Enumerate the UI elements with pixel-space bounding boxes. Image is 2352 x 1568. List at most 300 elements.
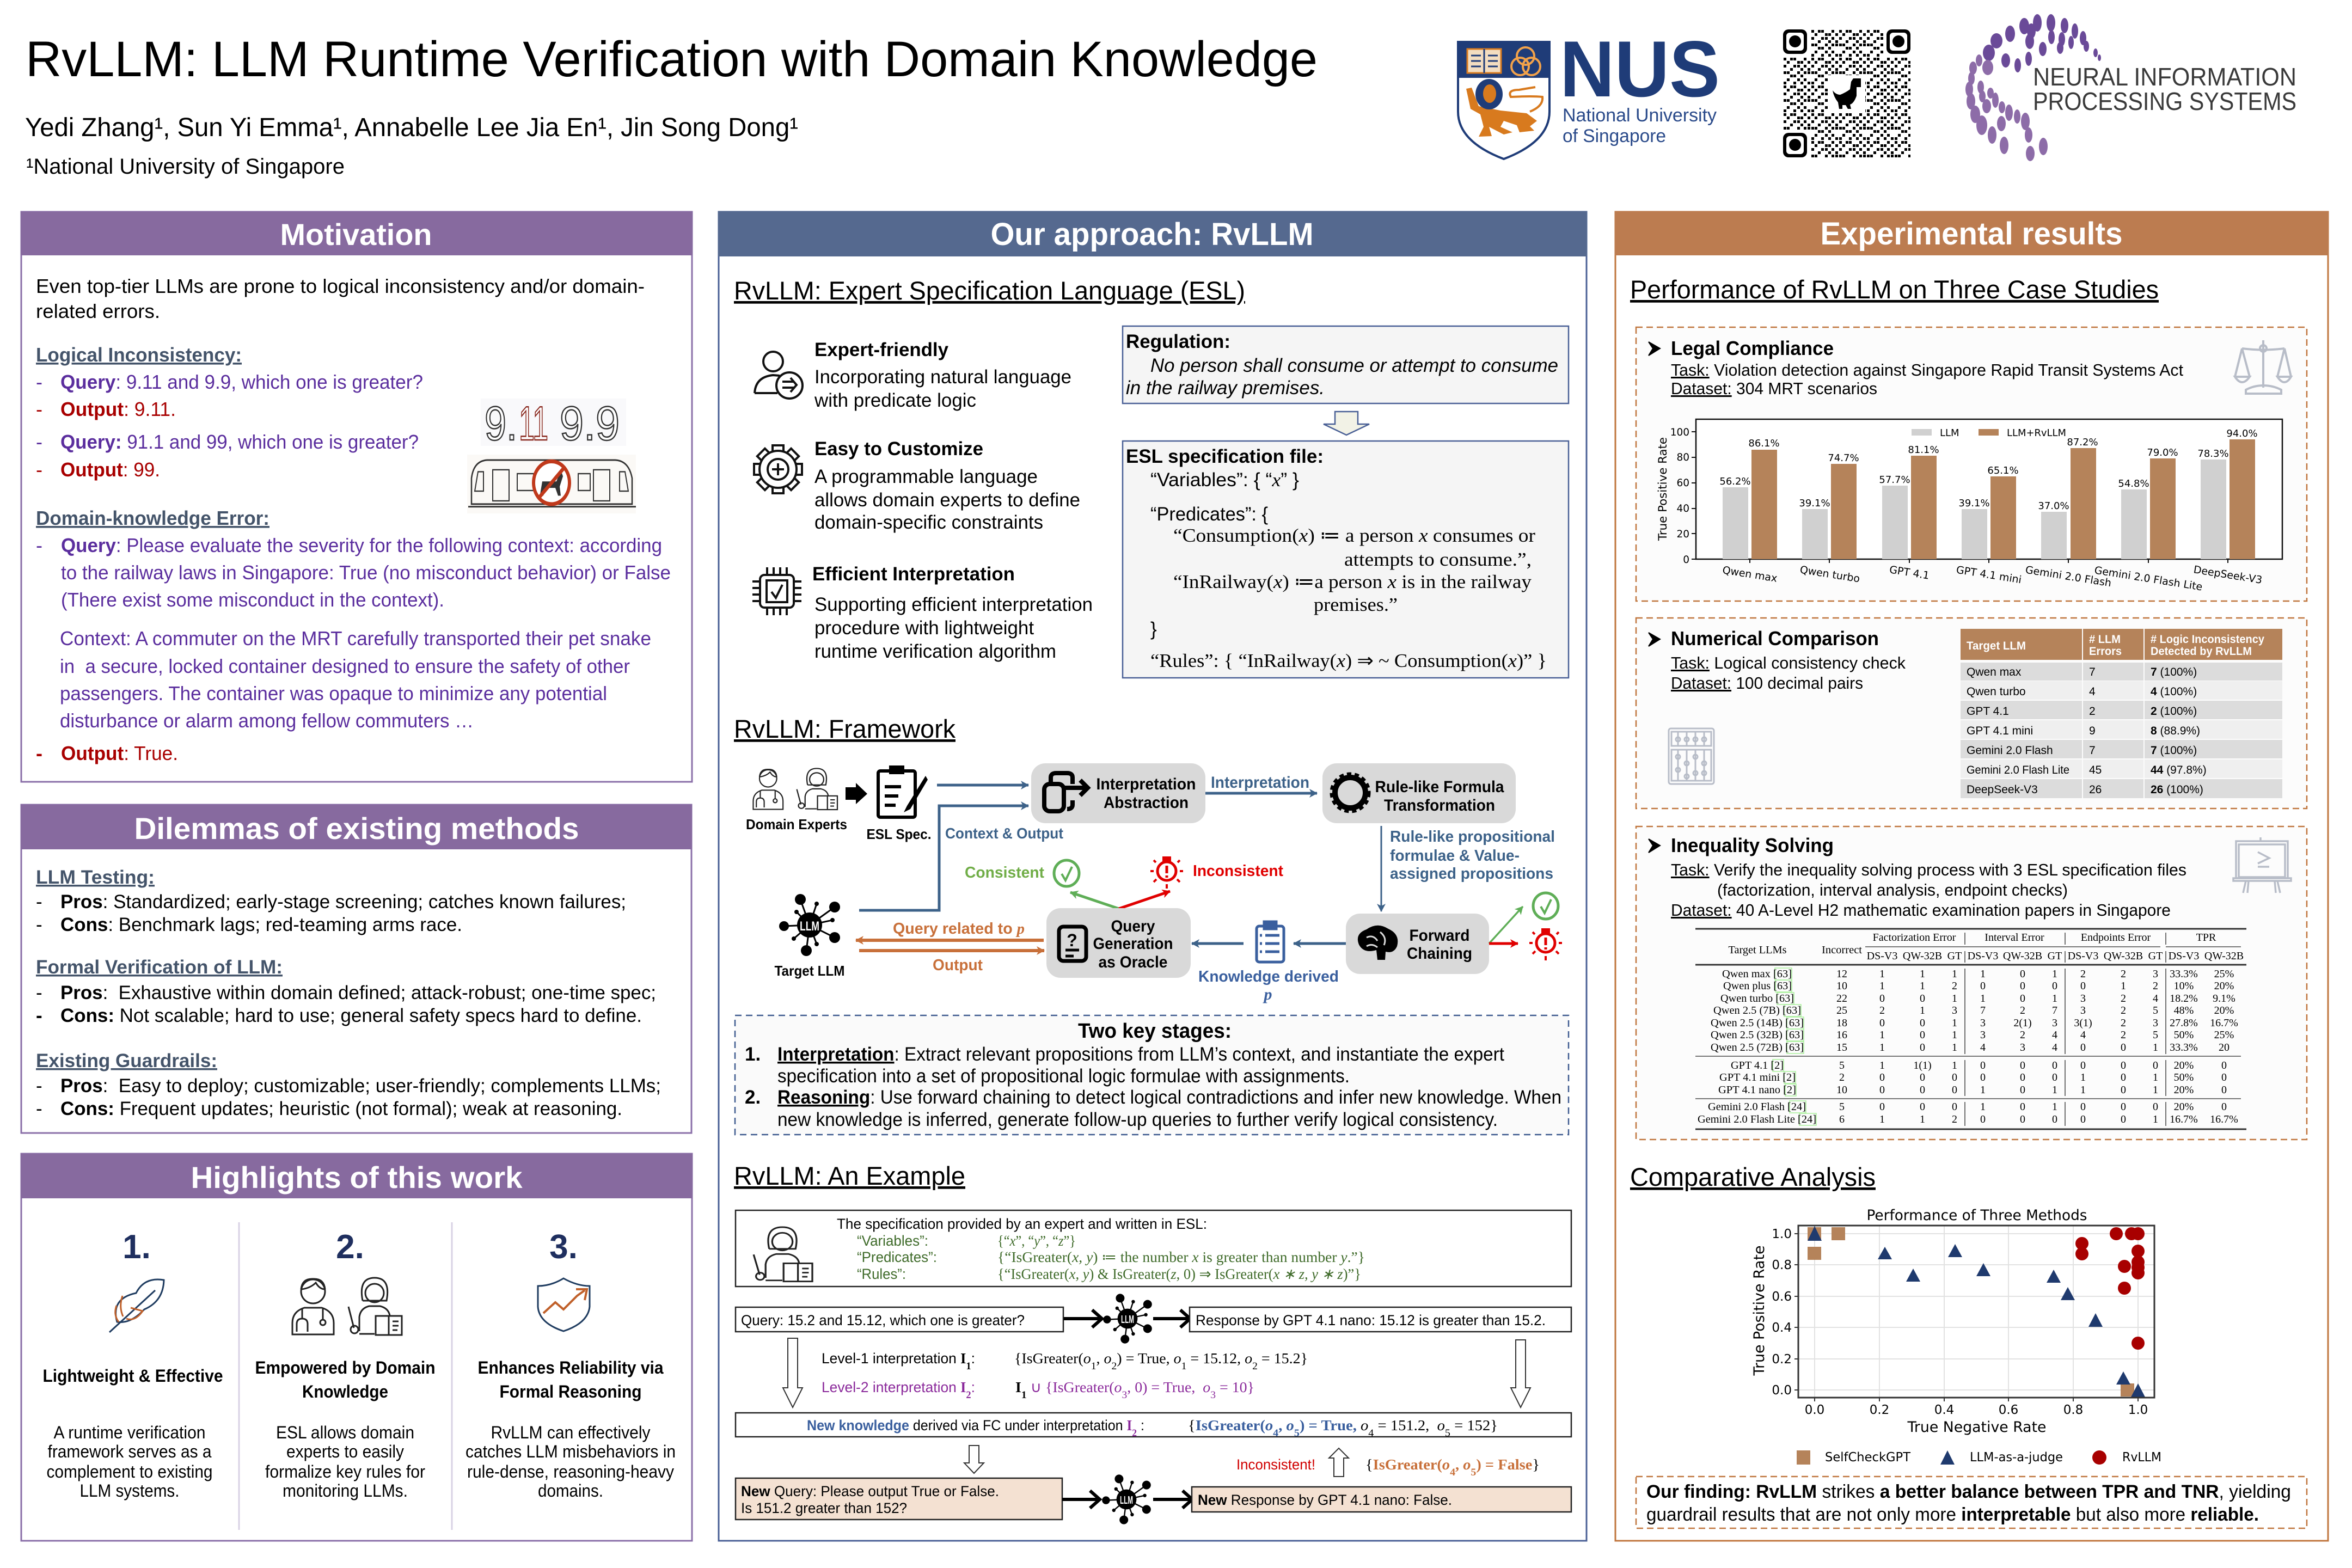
arrow: down to new query	[964, 1445, 984, 1473]
table: numerical comparison: GPT 4.1 mini	[1967, 725, 2033, 737]
arrow: formula to forward chaining	[1381, 826, 1382, 911]
table: inequality solving: 1	[2080, 1071, 2086, 1083]
table: inequality solving: 0	[2121, 1084, 2126, 1096]
logical inconsistency: Query: 9.11 and 9.9, which one is greater?	[60, 371, 423, 393]
ticks: 0.8	[1772, 1258, 1792, 1272]
highlights header	[21, 1154, 693, 1198]
judge points	[1808, 1226, 2145, 1397]
icon: ESL spec clipboard	[878, 765, 928, 817]
result consistent	[1489, 893, 1558, 944]
icon: target LLM: LLM	[800, 919, 819, 934]
formal verification	[36, 957, 656, 1026]
icon: person with arrow	[755, 352, 803, 399]
false formula: {IsGreater(o4, o5) = False}	[1365, 1456, 1540, 1478]
table: inequality solving: 3(1)	[2074, 1017, 2092, 1029]
table: inequality solving: QW-32B	[2104, 950, 2143, 962]
table: inequality solving: 0	[1879, 1101, 1885, 1113]
new response box	[1192, 1487, 1571, 1512]
ticks: 0.2	[1870, 1403, 1889, 1417]
logical inconsistency: Output: 99.	[60, 458, 160, 481]
y axis label: True Positive Rate	[1656, 437, 1669, 541]
logo: NUS	[1458, 24, 1720, 159]
ESL specification box: attempts to consume.”,	[1344, 549, 1532, 570]
table: inequality solving: 1	[2052, 993, 2057, 1004]
highlight 1	[42, 1228, 223, 1500]
table: inequality solving: 1	[1980, 968, 1986, 980]
icon: LLM second: LLM	[1120, 1494, 1133, 1506]
feature: easy to customize: domain-specific constraints	[814, 512, 1043, 533]
example: specification box: The specification provided by an expert and written in ESL:	[837, 1216, 1207, 1232]
table: inequality solving: Target LLMs	[1728, 944, 1787, 956]
table: inequality solving: 1	[1879, 1029, 1885, 1041]
table: inequality solving: 20	[2219, 1042, 2230, 1054]
formal verification: Formal Verification of LLM:	[36, 957, 283, 978]
table: numerical comparison: 4 (100%)	[2151, 685, 2197, 698]
illustration: train with no-pet sign	[467, 455, 636, 513]
highlight 3: rule-dense, reasoning-heavy	[467, 1462, 674, 1481]
dilemmas header: Dilemmas of existing methods	[134, 811, 579, 846]
panel: highlights	[21, 1154, 693, 1541]
table: inequality solving: Factorization Error	[1873, 932, 1956, 944]
LLM testing: LLM Testing:	[36, 867, 155, 888]
heading: ESL: RvLLM: Expert Specification Language (ESL)	[734, 276, 1245, 305]
table: inequality solving: 0	[1920, 1101, 1925, 1113]
logical inconsistency: Logical Inconsistency:	[36, 344, 242, 366]
table: inequality solving: 0	[2121, 1101, 2126, 1113]
legend: LLM+RvLLM	[2007, 427, 2066, 439]
highlight 2: 2.	[336, 1228, 364, 1266]
table: inequality solving: 3	[2052, 1017, 2057, 1029]
feature: expert-friendly	[755, 339, 1071, 411]
table: inequality solving: 2	[2121, 993, 2126, 1004]
feature: expert-friendly: Incorporating natural language	[814, 366, 1071, 388]
y axis: 20	[1676, 529, 1689, 540]
table: inequality solving: TPR	[2196, 932, 2216, 944]
table: inequality solving: 7	[2052, 1004, 2057, 1016]
highlight 1: Lightweight & Effective	[42, 1366, 223, 1386]
case: numerical comparison: Numerical Comparison	[1671, 627, 1879, 650]
table: inequality solving: 1	[1879, 1059, 1885, 1071]
table: inequality solving: QW-32B	[1903, 950, 1942, 962]
new knowledge box: {IsGreater( o4, o5) = True, o4 = 151.2, o5 = 152}	[1188, 1417, 1498, 1438]
arrow: spec to abstraction	[937, 784, 1028, 786]
label: ESL spec: ESL Spec.	[867, 826, 931, 842]
label: domain experts: Domain Experts	[746, 816, 847, 832]
new knowledge box	[736, 1413, 1571, 1438]
x labels: Qwen max	[1722, 564, 1778, 585]
highlight 3: domains.	[538, 1481, 603, 1500]
table: inequality solving: 0	[2052, 980, 2057, 992]
label: knowledge derived: p	[1262, 985, 1272, 1003]
table: inequality solving: 6	[1839, 1113, 1845, 1125]
LLM testing	[36, 867, 626, 935]
table: inequality solving: 1	[2052, 1084, 2057, 1096]
table: inequality solving: 1(1)	[1913, 1059, 1932, 1071]
table: inequality solving: Qwen plus [63]	[1723, 980, 1792, 992]
panel: dilemmas	[21, 805, 692, 1133]
heading: example: RvLLM: An Example	[734, 1161, 965, 1190]
panel: motivation	[21, 212, 693, 782]
box: query generation: Generation	[1093, 935, 1173, 953]
two key stages box: Interpretation: Extract relevant propositions from LLM’s context, and instantiate the expert	[777, 1044, 1504, 1065]
logical inconsistency: Output: 9.11.	[60, 398, 176, 420]
two key stages box: new knowledge is inferred, generate follow-up queries to further verify logical consistency.	[777, 1109, 1498, 1130]
panel: our approach	[718, 211, 1587, 1541]
table: inequality solving: 25%	[2214, 1029, 2234, 1041]
new query box: New Query: Please output True or False.	[741, 1483, 999, 1499]
box: interpretation abstraction: Abstraction	[1104, 794, 1189, 812]
highlight 2: ESL allows domain	[276, 1423, 414, 1442]
table: inequality solving: GT	[1947, 950, 1962, 962]
table: numerical comparison: 9	[2089, 725, 2096, 737]
table: inequality solving: 20%	[2174, 1084, 2194, 1096]
table: inequality solving: 4	[1980, 1042, 1986, 1054]
table: inequality solving: 2	[2121, 1017, 2126, 1029]
level-1 interpretation	[822, 1350, 1308, 1372]
table: inequality solving: 20%	[2174, 1101, 2194, 1113]
output arrow: Output	[933, 957, 983, 974]
table: inequality solving: 9.1%	[2213, 993, 2235, 1004]
case: legal compliance: Legal Compliance	[1671, 337, 1834, 359]
regulation box: in the railway premises.	[1126, 377, 1325, 399]
intro text	[36, 275, 645, 322]
table: inequality solving: 3	[1952, 1004, 1957, 1016]
two key stages box: specification into a set of propositional logic formulae with assignments.	[777, 1065, 1350, 1087]
table: inequality solving: Qwen 2.5 (14B) [63]	[1711, 1017, 1804, 1029]
table: inequality solving: 15	[1836, 1042, 1847, 1054]
table: numerical comparison: 2 (100%)	[2151, 705, 2197, 718]
box: rule-like transformation	[1322, 763, 1516, 823]
table: inequality solving: 2	[2020, 1004, 2025, 1016]
case: numerical comparison: Dataset: 100 decimal pairs	[1671, 673, 1863, 693]
bar values	[1719, 428, 2258, 512]
bar values: 78.3%	[2197, 448, 2229, 460]
y axis: 80	[1676, 452, 1689, 463]
ESL specification box: “Consumption( x) ≔ a person x consumes or	[1173, 525, 1535, 546]
x labels: Gemini 2.0 Flash Lite	[2093, 564, 2203, 593]
arrow: down left	[783, 1338, 803, 1407]
y axis: 100	[1670, 427, 1689, 438]
icon: gear	[754, 445, 802, 493]
box: forward chaining	[1346, 914, 1489, 974]
x labels: GPT 4.1 mini	[1955, 564, 2023, 586]
arrow: LLM to new response	[1153, 1491, 1192, 1508]
new knowledge box: New knowledge derived via FC under interpretation I2 :	[807, 1417, 1144, 1438]
ESL specification box: “Predicates”: {	[1150, 504, 1268, 525]
y axis: 60	[1676, 477, 1689, 489]
ESL specification box: ESL specification file:	[1126, 446, 1324, 467]
finding callout: Our finding: RvLLM strikes a better balance between TPR and TNR, yielding	[1646, 1481, 2291, 1502]
logical inconsistency: -	[36, 371, 42, 393]
bar values: 74.7%	[1828, 452, 1859, 464]
logical inconsistency: -	[36, 431, 42, 453]
table: inequality solving: 33.3%	[2170, 1042, 2198, 1054]
table: inequality solving: 0	[2221, 1101, 2227, 1113]
table: inequality solving: 1	[1920, 1113, 1925, 1125]
box: forward chaining: Chaining	[1407, 945, 1472, 963]
ESL specification box: “Variables”: { “x” }	[1150, 469, 1299, 491]
table: numerical comparison: Gemini 2.0 Flash Lite	[1967, 764, 2069, 776]
arrow: down right	[1511, 1340, 1530, 1407]
case: numerical comparison	[1636, 618, 2307, 808]
ticks: 0.6	[1999, 1403, 2018, 1417]
table: inequality solving: 20%	[2214, 1004, 2234, 1016]
example: query box	[736, 1307, 1063, 1332]
bar values: 81.1%	[1908, 444, 1939, 456]
ticks: 0.4	[1934, 1403, 1954, 1417]
table: inequality solving: 0	[2052, 1059, 2057, 1071]
arrow: new query to LLM	[1062, 1491, 1100, 1508]
regulation box: Regulation:	[1126, 331, 1230, 352]
table: inequality solving: 0	[2080, 1113, 2086, 1125]
domain-knowledge error: Context: A commuter on the MRT carefully transported their pet snake	[60, 627, 651, 650]
table: inequality solving: 2	[2020, 1029, 2025, 1041]
example: specification box: “Rules”:	[857, 1266, 906, 1282]
table: numerical comparison: 26	[2089, 783, 2102, 796]
approach header	[718, 211, 1587, 256]
ticks: 0.0	[1772, 1383, 1792, 1398]
table: inequality solving: 0	[1980, 980, 1986, 992]
table: inequality solving: 3	[2080, 1004, 2086, 1016]
table: numerical comparison: DeepSeek-V3	[1967, 783, 2038, 796]
table: inequality solving: 2(1)	[2013, 1017, 2032, 1029]
highlight 2	[255, 1228, 436, 1500]
label: knowledge derived	[1198, 968, 1339, 1003]
feature: efficient interpretation: procedure with lightweight	[814, 617, 1034, 639]
table: inequality solving: QW-32B	[2003, 950, 2042, 962]
x labels: Qwen turbo	[1799, 564, 1861, 585]
table: inequality solving: 0	[2020, 1071, 2025, 1083]
new response box: New Response by GPT 4.1 nano: False.	[1198, 1492, 1452, 1508]
label: propositions: assigned propositions	[1390, 865, 1553, 883]
table: inequality solving: 1	[1952, 1059, 1957, 1071]
table: inequality solving: 0	[2153, 1059, 2158, 1071]
table: inequality solving: 1	[1952, 1042, 1957, 1054]
table: inequality solving: 0	[1879, 1084, 1885, 1096]
feature: easy to customize: A programmable language	[814, 466, 1038, 487]
level-2 interpretation	[822, 1379, 1254, 1400]
arrow: LLM to response	[1153, 1310, 1190, 1327]
highlight 3: Enhances Reliability via	[478, 1358, 664, 1377]
table: inequality solving: 2	[2080, 968, 2086, 980]
ESL specification box: “InRailway( x) ≔a person x is in the railway	[1173, 571, 1532, 592]
logo: NeurIPS	[1965, 14, 2296, 161]
table: inequality solving: Qwen 2.5 (7B) [63]	[1713, 1004, 1801, 1016]
highlight 1: 1.	[122, 1228, 151, 1266]
table: inequality solving: DS-V3	[1867, 950, 1897, 962]
results header: Experimental results	[1821, 216, 2122, 252]
icon: domain experts	[753, 768, 837, 810]
table: numerical comparison: 2	[2089, 705, 2096, 718]
table: inequality solving: 25	[1836, 1004, 1847, 1016]
table: inequality solving: Qwen turbo [63]	[1720, 993, 1794, 1004]
label: propositions	[1390, 828, 1555, 883]
table: inequality solving: 1	[2153, 1071, 2158, 1083]
example: response box: Response by GPT 4.1 nano: 15.12 is greater than 15.2.	[1196, 1312, 1546, 1328]
domain-knowledge error: Domain-knowledge Error:	[36, 507, 270, 529]
case: inequality solving: Task: Verify the inequality solving process with 3 ESL specification files	[1671, 860, 2186, 879]
icon: LLM second	[1102, 1474, 1151, 1524]
icon: knowledge clipboard	[1257, 922, 1284, 962]
title: RvLLM: LLM Runtime Verification with Domain Knowledge	[26, 32, 1318, 87]
highlight 2: monitoring LLMs.	[283, 1481, 408, 1500]
table: inequality solving: 1	[2153, 1084, 2158, 1096]
table: inequality solving: 0	[2020, 993, 2025, 1004]
box: interpretation abstraction	[1031, 763, 1205, 823]
table: inequality solving: 2	[1952, 1113, 1957, 1125]
illustration: 9.11 vs 9.9: 9.9	[560, 396, 620, 450]
ESL specification box: “Rules”: { “InRailway( x) ⇒ ~ Consumption( x)” }	[1150, 650, 1547, 671]
existing guardrails	[36, 1050, 661, 1119]
icon: abacus	[1669, 728, 1714, 784]
highlight 3: RvLLM can effectively	[491, 1423, 650, 1442]
table: inequality solving: 0	[2221, 1071, 2227, 1083]
domain-knowledge error: passengers. The container was opaque to minimize any potential	[60, 682, 607, 705]
table: inequality solving: 2	[2121, 1004, 2126, 1016]
table: inequality solving: 1	[2121, 980, 2126, 992]
example: specification box: {“x”, “y”, “z”}	[997, 1233, 1076, 1249]
table: numerical comparison: 7	[2089, 666, 2096, 678]
icon: scales	[2235, 340, 2291, 394]
table: inequality solving: 0	[1879, 1071, 1885, 1083]
bullet	[1649, 342, 1660, 356]
table: inequality solving: 1	[1920, 980, 1925, 992]
formal verification: Pros: Exhaustive within domain defined; attack-robust; one-time spec;	[60, 982, 656, 1003]
existing guardrails: -	[36, 1098, 42, 1119]
table: inequality solving: QW-32B	[2204, 950, 2244, 962]
icon: chip	[752, 567, 801, 615]
gray bars	[1723, 460, 2226, 559]
table: inequality solving: 0	[1920, 993, 1925, 1004]
table: inequality solving: 0	[2020, 1084, 2025, 1096]
icon: LLM	[1103, 1294, 1152, 1344]
table: inequality solving: 1	[1952, 1017, 1957, 1029]
highlight 1: LLM systems.	[79, 1481, 180, 1500]
table: inequality solving: Gemini 2.0 Flash Lite [24]	[1698, 1113, 1816, 1125]
heading: comparative analysis: Comparative Analysis	[1630, 1162, 1876, 1191]
table: numerical comparison: 45	[2089, 764, 2102, 776]
highlight 2: experts to easily	[286, 1442, 404, 1461]
arrow: target LLM to abstraction	[859, 806, 1028, 910]
table: inequality solving: 16.7%	[2210, 1113, 2238, 1125]
label: context and output: Context & Output	[945, 825, 1063, 842]
table: numerical comparison: # Logic Inconsistency	[2151, 633, 2264, 646]
table: inequality solving: 0	[1920, 1042, 1925, 1054]
feature: efficient interpretation: Supporting efficient interpretation	[814, 594, 1093, 615]
bullet	[1649, 839, 1660, 853]
table: inequality solving: 10	[1836, 1084, 1847, 1096]
arrow: query to LLM	[1064, 1310, 1102, 1327]
legend: SelfCheckGPT	[1825, 1450, 1911, 1465]
table: numerical comparison: 7 (100%)	[2151, 744, 2197, 757]
arrow: interpretation: Interpretation	[1211, 774, 1309, 792]
legend	[1797, 1450, 2161, 1465]
table: inequality solving: 0	[2153, 1101, 2158, 1113]
table: inequality solving: DS-V3	[2169, 950, 2199, 962]
two key stages box	[735, 1015, 1569, 1135]
table: inequality solving: 0	[2080, 980, 2086, 992]
box: interpretation abstraction: Interpretation	[1097, 775, 1196, 793]
table: inequality solving: 4	[2052, 1029, 2057, 1041]
table: inequality solving: 1	[1952, 1029, 1957, 1041]
table: inequality solving: 0	[1920, 1084, 1925, 1096]
box: forward chaining: Forward	[1409, 927, 1470, 945]
table: inequality solving: 50%	[2174, 1029, 2194, 1041]
case: inequality solving: Dataset: 40 A-Level H2 mathematic examination papers in Singapore	[1671, 901, 2171, 920]
illustration: 9.11 vs 9.9	[481, 396, 626, 450]
example: query box: Query: 15.2 and 15.12, which one is greater?	[741, 1312, 1025, 1328]
table: numerical comparison: 26 (100%)	[2151, 783, 2203, 796]
case: inequality solving: Inequality Solving	[1671, 834, 1834, 856]
ticks: 0.2	[1772, 1352, 1792, 1367]
table: inequality solving: 4	[2153, 993, 2158, 1004]
level-2 interpretation: I1 ∪ {IsGreater(o3, 0) = True, o3 = 10}	[1015, 1379, 1254, 1400]
level-1 interpretation: Level-1 interpretation I1:	[822, 1350, 975, 1372]
domain-knowledge error: in a secure, locked container designed to ensure the safety of other	[60, 655, 630, 677]
query arrow: Query related to p	[893, 920, 1025, 938]
bullet	[1649, 633, 1660, 646]
table: inequality solving: 1	[1980, 1101, 1986, 1113]
axis labels: True Negative Rate	[1907, 1419, 2046, 1436]
feature: easy to customize: allows domain experts to define	[814, 489, 1080, 511]
LLM testing: -	[36, 891, 42, 912]
illustration: 9.11 vs 9.9: 11	[519, 396, 548, 450]
table: inequality solving: 10%	[2174, 980, 2194, 992]
cite highlight boxes	[1773, 968, 1816, 1125]
heading: framework: RvLLM: Framework	[734, 714, 955, 743]
ticks: 0.0	[1805, 1403, 1824, 1417]
self-check points	[1808, 1227, 2134, 1396]
framework diagram	[746, 763, 1562, 1003]
authors: Yedi Zhang¹, Sun Yi Emma¹, Annabelle Lee Jia En¹, Jin Song Dong¹	[25, 113, 798, 142]
table: inequality solving: 0	[1980, 1071, 1986, 1083]
table: inequality solving: 10	[1836, 980, 1847, 992]
example: response box	[1190, 1307, 1571, 1332]
logical inconsistency	[36, 344, 423, 481]
table: inequality solving: 1	[1879, 1042, 1885, 1054]
tan bars	[1751, 439, 2255, 559]
table: inequality solving: 16	[1836, 1029, 1847, 1041]
inconsistent	[1119, 856, 1283, 909]
bar chart: TPR	[1656, 419, 2282, 593]
table: inequality solving: 0	[2052, 1071, 2057, 1083]
table: inequality solving: 1	[2052, 1101, 2057, 1113]
table: inequality solving: 48%	[2174, 1004, 2194, 1016]
domain-knowledge error: -	[36, 534, 42, 556]
table: inequality solving: 0	[2221, 1084, 2227, 1096]
bar values: 65.1%	[1987, 465, 2019, 476]
table: numerical comparison: 7	[2089, 744, 2096, 757]
two key stages box: 2.	[745, 1087, 761, 1108]
feature: expert-friendly: with predicate logic	[814, 390, 976, 411]
table: inequality solving: 25%	[2214, 968, 2234, 980]
table: inequality solving: 1	[1920, 1004, 1925, 1016]
label: target LLM: Target LLM	[774, 963, 845, 979]
table: inequality solving: 0	[1879, 993, 1885, 1004]
y axis: 0	[1683, 554, 1689, 566]
table: inequality solving: 1	[2052, 968, 2057, 980]
example: specification box: “Predicates”:	[857, 1249, 937, 1265]
ESL specification box	[1123, 441, 1569, 678]
box: query generation: Query	[1111, 917, 1155, 935]
table: inequality solving: 33.3%	[2170, 968, 2198, 980]
logical inconsistency: -	[36, 458, 42, 481]
box: query generation	[1046, 908, 1191, 978]
intro text: Even top-tier LLMs are prone to logical inconsistency and/or domain-	[36, 275, 645, 297]
logo: NeurIPS: PROCESSING SYSTEMS	[2033, 87, 2296, 115]
feature: easy to customize: Easy to Customize	[814, 438, 983, 460]
table: inequality solving: DS-V3	[2068, 950, 2098, 962]
